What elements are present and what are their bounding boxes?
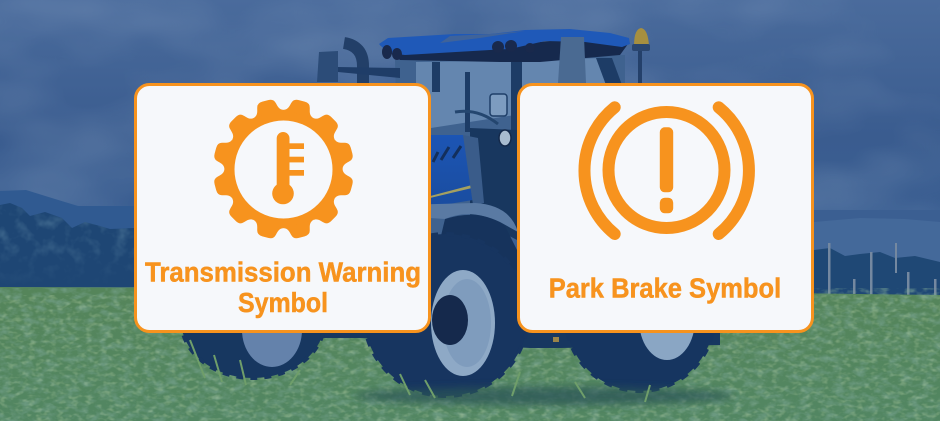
tree line right [814,248,940,295]
side column [463,135,484,205]
exhaust pipe [344,43,363,90]
left brake arc [584,107,615,234]
roof top shade [440,31,525,43]
distant hill right [814,218,940,270]
dark fender [440,215,517,280]
tree foliage highlights left [0,203,134,287]
brake ring [608,112,724,228]
sky with clouds [0,0,940,300]
exclamation dot [660,198,673,213]
gear centre [234,120,332,218]
hood vents [433,146,461,162]
axle light [553,337,559,342]
distant hills left [0,190,134,240]
rear right wheel [566,245,714,391]
beacon post [638,50,642,84]
hood stripe [400,185,472,210]
blue roof [379,29,630,55]
blue hood [400,135,473,212]
right cab mirror small [490,94,507,116]
cab glass [416,58,612,128]
right brake arc [719,107,749,234]
right mirror [558,37,586,83]
roof work lights [382,40,535,60]
grass foreground over tyres [190,340,735,405]
icon: park brake warning [584,107,749,234]
card background [518,84,812,332]
beacon [634,28,649,46]
left mirror arm [338,67,400,78]
tree line left [0,203,134,287]
grass field [0,287,940,421]
tree shadow base left [0,240,134,287]
label: park brake symbol: Park Brake Symbol [549,273,781,304]
beacon base [632,44,650,51]
exclamation stem [660,127,673,192]
cab pillars [432,58,622,133]
card background [136,84,430,332]
thermometer [272,132,304,204]
left mirror [317,51,338,82]
left rear wheel [181,262,325,378]
engine block [470,128,517,240]
headlight [499,130,511,146]
fence posts [828,243,936,301]
panel: park brake [518,84,812,332]
icon: gear with thermometer [211,97,356,241]
panel: transmission warning [136,84,430,332]
label: symbol: Symbol [238,287,328,318]
front centre wheel [364,234,528,396]
gear teeth and body [211,97,356,241]
steering wheel [455,111,498,124]
label: transmission warning symbol: Transmission Warning [145,256,421,288]
cab roof underside [380,40,628,62]
tractor cab body [395,55,625,240]
lower chassis [320,320,720,348]
tractor [181,28,720,396]
grey fender band [400,203,518,232]
